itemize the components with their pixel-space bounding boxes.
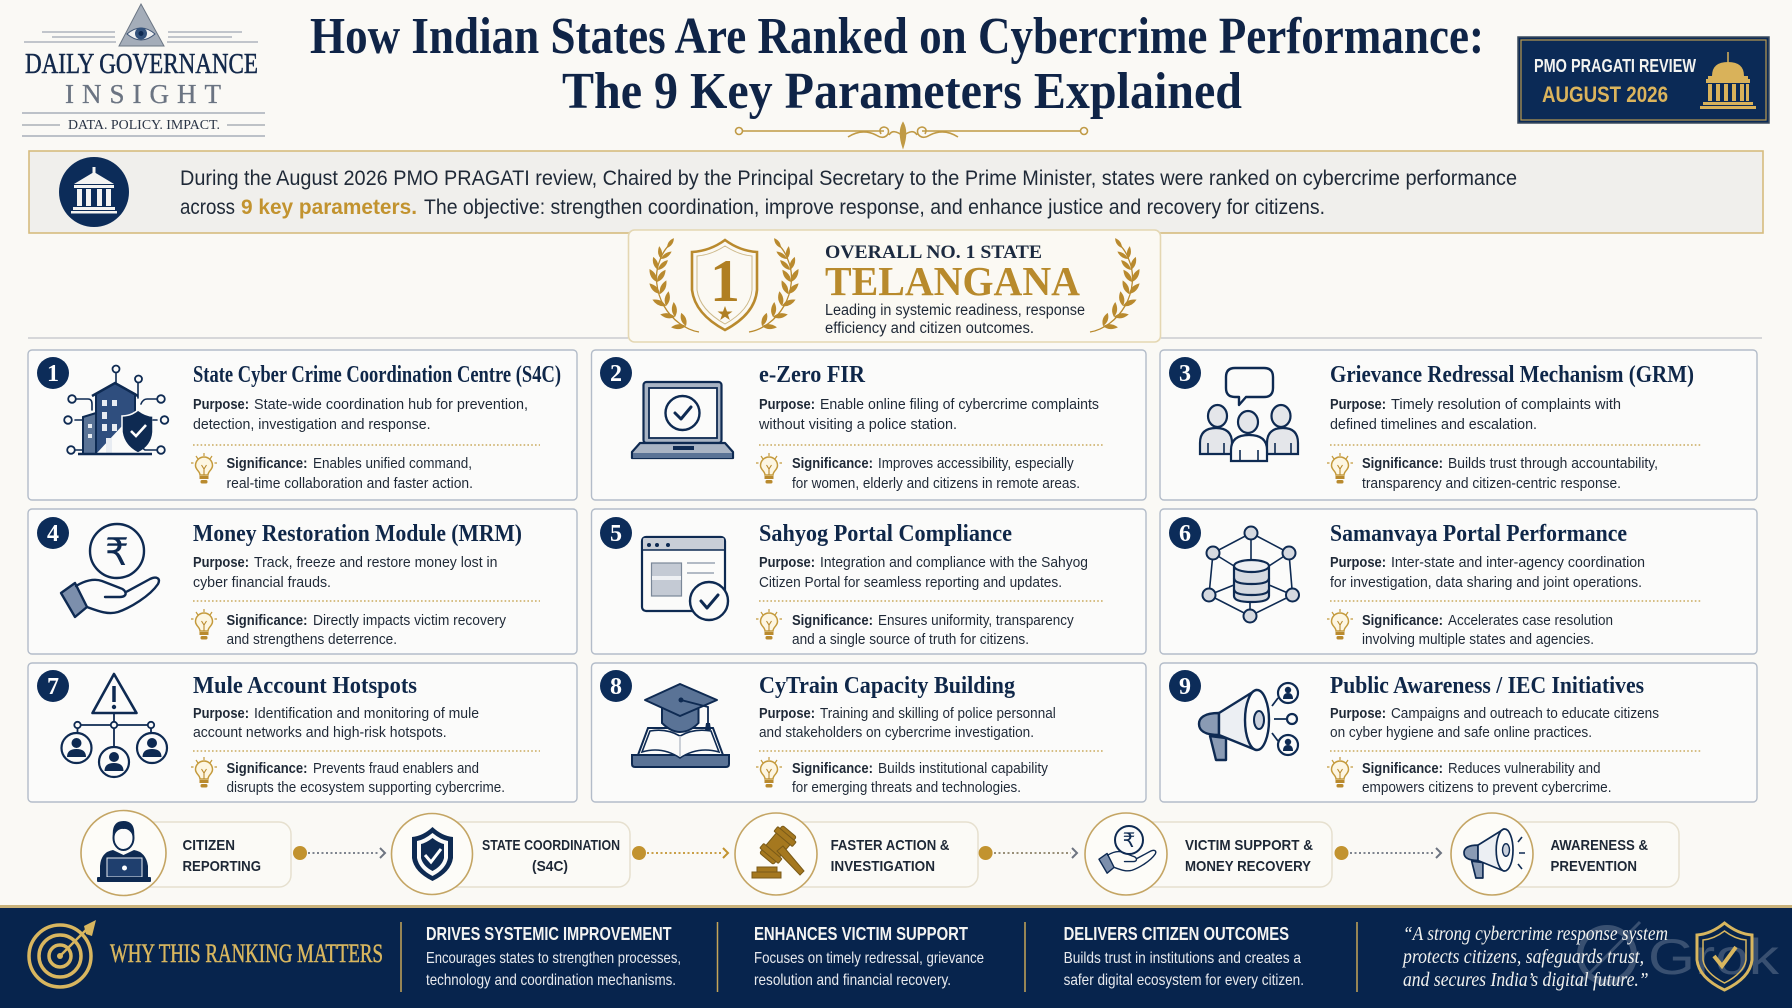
purpose text	[1330, 554, 1645, 591]
watermark: Grok	[1578, 922, 1780, 985]
purpose text: and stakeholders on cybercrime investigation.	[759, 724, 1034, 741]
step label: INVESTIGATION	[831, 858, 935, 875]
purpose text: Purpose:	[759, 705, 815, 722]
number badge 3	[1169, 357, 1201, 389]
purpose text	[759, 705, 1056, 741]
badge line 2: AUGUST 2026	[1542, 82, 1668, 107]
card heading: Sahyog Portal Compliance	[759, 521, 1012, 547]
purpose text	[758, 396, 1099, 433]
icon: bulb	[191, 757, 217, 788]
panel: card 7 Mule accounts	[28, 663, 577, 802]
step label	[1550, 837, 1648, 875]
significance text: real-time collaboration and faster action.	[226, 475, 473, 492]
footer quote: protects citizens, safeguards trust,	[1401, 946, 1644, 968]
purpose text: Purpose:	[1330, 705, 1386, 722]
number badge 8	[600, 670, 632, 702]
purpose text: cyber financial frauds.	[193, 574, 331, 591]
significance text: Significance:	[226, 455, 308, 472]
title	[310, 8, 1484, 120]
label: overall no. 1 state: OVERALL NO. 1 STATE	[825, 242, 1042, 263]
number badge 8: 8	[610, 674, 622, 700]
icon: bulb	[191, 609, 217, 640]
icon: person at laptop	[97, 821, 151, 882]
purpose text: Purpose:	[759, 554, 815, 571]
significance text	[226, 455, 473, 492]
icon: right laurel	[1090, 237, 1142, 332]
intro text	[180, 167, 1517, 219]
intro panel	[29, 151, 1763, 233]
icon: bulb	[756, 609, 782, 640]
significance text: Accelerates case resolution	[1448, 612, 1613, 629]
step label: VICTIM SUPPORT &	[1185, 837, 1313, 854]
number badge 6: 6	[1179, 521, 1191, 547]
significance text	[1362, 455, 1658, 492]
panel: card 1 S4C	[28, 350, 577, 500]
icon: people with speech bubble	[1200, 368, 1298, 461]
icon: hand holding rupee	[61, 524, 159, 617]
significance text: empowers citizens to prevent cybercrime.	[1362, 779, 1612, 796]
step label: REPORTING	[182, 858, 261, 875]
icon: gold shield	[1697, 923, 1752, 990]
purpose text: Enable online filing of cybercrime complaints	[820, 396, 1099, 413]
purpose text: defined timelines and escalation.	[1330, 416, 1537, 433]
card heading: State Cyber Crime Coordination Centre (S4C)	[193, 362, 561, 388]
number badge 7: 7	[47, 674, 59, 700]
significance text	[1362, 612, 1613, 648]
intro text: 9 key parameters.	[241, 196, 417, 219]
significance text: Significance:	[226, 760, 308, 777]
step label: PREVENTION	[1550, 858, 1637, 875]
icon: hand holding rupee: ₹	[105, 530, 129, 574]
purpose text	[193, 554, 498, 591]
step: state coordination	[392, 814, 630, 894]
title: How Indian States Are Ranked on Cybercrime Performance:	[310, 8, 1484, 65]
icon: bulb	[1327, 757, 1353, 788]
purpose text: without visiting a police station.	[758, 416, 957, 433]
footer column: systemic improvement: technology and coordination mechanisms.	[426, 972, 676, 989]
purpose text: Purpose:	[759, 396, 815, 413]
purpose text: State-wide coordination hub for prevention,	[254, 396, 528, 413]
step label: (S4C)	[532, 858, 568, 875]
watermark: Grok: Grok	[1648, 929, 1780, 985]
number badge 3: 3	[1179, 361, 1191, 387]
logo: Daily Governance Insight	[22, 4, 265, 136]
purpose text: Purpose:	[1330, 554, 1386, 571]
footer column: citizen outcomes: safer digital ecosystem for every citizen.	[1064, 972, 1304, 989]
purpose text: Purpose:	[193, 396, 249, 413]
panel: card 8 CyTrain	[592, 663, 1146, 802]
significance text: Prevents fraud enablers and	[313, 760, 479, 777]
purpose text: Purpose:	[1330, 396, 1386, 413]
icon: rupee in hand	[1099, 826, 1156, 873]
icon: bulb	[1327, 609, 1353, 640]
winner description: Leading in systemic readiness, response	[825, 302, 1085, 319]
icon: middle laurel	[749, 237, 801, 332]
significance text: and a single source of truth for citizens.	[792, 631, 1029, 648]
significance text: involving multiple states and agencies.	[1362, 631, 1594, 648]
purpose text: account networks and high-risk hotspots.	[193, 724, 447, 741]
logo tagline: DATA. POLICY. IMPACT.	[68, 117, 220, 132]
significance text: Improves accessibility, especially	[878, 455, 1074, 472]
panel: card 2 e-Zero FIR	[592, 350, 1146, 500]
footer column: systemic improvement	[426, 924, 681, 989]
step label	[831, 837, 950, 875]
purpose text: Track, freeze and restore money lost in	[254, 554, 498, 571]
significance text: for emerging threats and technologies.	[792, 779, 1021, 796]
icon: bulb	[1327, 453, 1353, 484]
purpose text: for investigation, data sharing and joint operations.	[1330, 574, 1642, 591]
panel: card 6 Samanvaya	[1160, 509, 1757, 654]
significance text	[226, 612, 506, 648]
significance text: Significance:	[1362, 455, 1443, 472]
arrow: to state coordination	[293, 846, 385, 860]
step label	[182, 837, 261, 875]
step label: AWARENESS &	[1550, 837, 1648, 854]
purpose text: Purpose:	[193, 705, 249, 722]
number badge 7	[37, 670, 69, 702]
step: victim support	[1085, 813, 1332, 895]
significance text: Builds institutional capability	[878, 760, 1048, 777]
purpose text: Timely resolution of complaints with	[1391, 396, 1621, 413]
number badge 9: 9	[1179, 674, 1191, 700]
icon: left laurel	[647, 237, 699, 332]
significance text: Significance:	[1362, 612, 1443, 629]
purpose text: Citizen Portal for seamless reporting and updates.	[759, 574, 1062, 591]
number badge 5: 5	[610, 521, 622, 547]
title ornament	[736, 123, 1088, 147]
footer column: systemic improvement: Encourages states to strengthen processes,	[426, 950, 681, 967]
number badge 2: 2	[610, 361, 622, 387]
number badge 2	[600, 357, 632, 389]
step label	[482, 837, 620, 875]
icon: browser with check	[642, 537, 728, 620]
footer column: victim support	[754, 924, 984, 989]
significance text: disrupts the ecosystem supporting cybercrime.	[226, 779, 505, 796]
panel: card 5 Sahyog	[592, 509, 1146, 654]
winner description	[825, 302, 1085, 337]
purpose text: on cyber hygiene and safe online practices.	[1330, 724, 1592, 741]
step label: FASTER ACTION &	[831, 837, 950, 854]
icon: shield with 1: 1	[710, 248, 740, 314]
significance text: Reduces vulnerability and	[1448, 760, 1600, 777]
footer column: victim support: resolution and financial recovery.	[754, 972, 951, 989]
step label: STATE COORDINATION	[482, 837, 620, 854]
card heading: e-Zero FIR	[759, 362, 866, 388]
significance text: Ensures uniformity, transparency	[878, 612, 1074, 629]
icon: megaphone	[1464, 829, 1525, 878]
significance text: Significance:	[792, 760, 873, 777]
purpose text	[193, 705, 479, 741]
footer quote	[1401, 923, 1668, 991]
purpose text: Training and skilling of police personnal	[820, 705, 1056, 722]
card heading: Grievance Redressal Mechanism (GRM)	[1330, 362, 1694, 388]
arrow: to faster action	[632, 846, 728, 860]
footer band	[0, 905, 1792, 1008]
title: The 9 Key Parameters Explained	[562, 63, 1242, 120]
purpose text: Inter-state and inter-agency coordination	[1391, 554, 1645, 571]
icon: bulb	[191, 453, 217, 484]
icon: shield with 1	[692, 240, 757, 330]
badge line 1: PMO PRAGATI REVIEW	[1534, 56, 1696, 76]
icon: rupee in hand: ₹	[1123, 828, 1135, 852]
intro text: During the August 2026 PMO PRAGATI review, Chaired by the Principal Secretary to the Prime Minister, states were ranked on cybercrime performance	[180, 167, 1517, 190]
purpose text	[193, 396, 528, 433]
card heading: Samanvaya Portal Performance	[1330, 521, 1627, 547]
significance text: Significance:	[792, 455, 873, 472]
footer column: victim support: Focuses on timely redressal, grievance	[754, 950, 984, 967]
purpose text: detection, investigation and response.	[193, 416, 430, 433]
card heading: Public Awareness / IEC Initiatives	[1330, 673, 1644, 699]
icon: networked building	[64, 366, 168, 454]
icon: alert with accounts	[62, 674, 167, 777]
footer column: systemic improvement: DRIVES SYSTEMIC IMPROVEMENT	[426, 924, 672, 944]
panel: overall no. 1 state	[628, 230, 1160, 342]
logo wordmark: DAILY GOVERNANCE	[25, 48, 258, 80]
panel: card 4 MRM	[28, 509, 577, 654]
card heading: CyTrain Capacity Building	[759, 673, 1015, 699]
purpose text: Identification and monitoring of mule	[254, 705, 479, 722]
arrow: to victim support	[979, 846, 1077, 860]
significance text: Significance:	[1362, 760, 1443, 777]
state name: TELANGANA	[825, 258, 1080, 304]
purpose text	[1330, 705, 1659, 741]
significance text: Builds trust through accountability,	[1448, 455, 1658, 472]
significance text: and strengthens deterrence.	[226, 631, 397, 648]
flow: process chain	[81, 810, 1679, 896]
purpose text	[1330, 396, 1621, 433]
step: citizen reporting	[81, 810, 291, 896]
significance text	[226, 760, 505, 796]
footer quote: and secures India’s digital future.”	[1403, 969, 1649, 991]
significance text	[1362, 760, 1612, 796]
icon: laptop with check	[632, 382, 733, 458]
purpose text	[759, 554, 1088, 591]
footer column: citizen outcomes: DELIVERS CITIZEN OUTCOMES	[1064, 924, 1289, 944]
intro text: across	[180, 196, 235, 219]
arrow: to awareness	[1334, 846, 1441, 860]
icon: eye pyramid	[24, 4, 258, 46]
purpose text: Campaigns and outreach to educate citizens	[1391, 705, 1659, 722]
icon: parliament building	[1700, 52, 1756, 109]
footer heading: WHY THIS RANKING MATTERS	[110, 939, 383, 968]
significance text	[792, 612, 1074, 648]
number badge 6	[1169, 517, 1201, 549]
significance text: Significance:	[226, 612, 308, 629]
icon: target with arrow	[29, 920, 96, 987]
step label: MONEY RECOVERY	[1185, 858, 1311, 875]
icon: bulb	[756, 453, 782, 484]
card heading: Mule Account Hotspots	[193, 673, 417, 699]
purpose text: Integration and compliance with the Sahyog	[820, 554, 1088, 571]
number badge 9	[1169, 670, 1201, 702]
significance text: Directly impacts victim recovery	[313, 612, 506, 629]
icon: government building	[59, 157, 129, 227]
significance text: for women, elderly and citizens in remote areas.	[792, 475, 1080, 492]
intro text: The objective: strengthen coordination, improve response, and enhance justice and recovery for citizens.	[424, 196, 1325, 219]
icon: database network	[1202, 526, 1299, 622]
significance text: Significance:	[792, 612, 873, 629]
significance text: Enables unified command,	[313, 455, 472, 472]
icon: graduation cap on book	[632, 684, 729, 767]
footer column: victim support: ENHANCES VICTIM SUPPORT	[754, 924, 968, 944]
number badge 4	[37, 517, 69, 549]
icon: shield with check	[412, 827, 453, 881]
purpose text: Purpose:	[193, 554, 249, 571]
step: awareness	[1451, 813, 1679, 895]
logo subword: INSIGHT	[65, 79, 222, 109]
significance text	[792, 760, 1048, 796]
panel: card 9 Public awareness	[1160, 663, 1757, 802]
winner description: efficiency and citizen outcomes.	[825, 320, 1034, 337]
step label	[1185, 837, 1313, 875]
number badge 5	[600, 517, 632, 549]
icon: gavel	[752, 823, 804, 878]
footer column: citizen outcomes	[1064, 924, 1304, 989]
step: faster action	[735, 813, 978, 895]
number badge 1: 1	[47, 361, 59, 387]
panel: card 3 GRM	[1160, 350, 1757, 500]
badge: PMO PRAGATI review	[1518, 37, 1769, 123]
footer column: citizen outcomes: Builds trust in institutions and creates a	[1064, 950, 1301, 967]
footer quote: “A strong cybercrime response system	[1403, 923, 1668, 945]
step label: CITIZEN	[182, 837, 235, 854]
significance text: transparency and citizen-centric response.	[1362, 475, 1621, 492]
icon: bulb	[756, 757, 782, 788]
number badge 4: 4	[47, 521, 59, 547]
significance text	[792, 455, 1080, 492]
number badge 1	[37, 357, 69, 389]
card heading: Money Restoration Module (MRM)	[193, 521, 522, 547]
icon: megaphone with audience	[1199, 683, 1298, 760]
